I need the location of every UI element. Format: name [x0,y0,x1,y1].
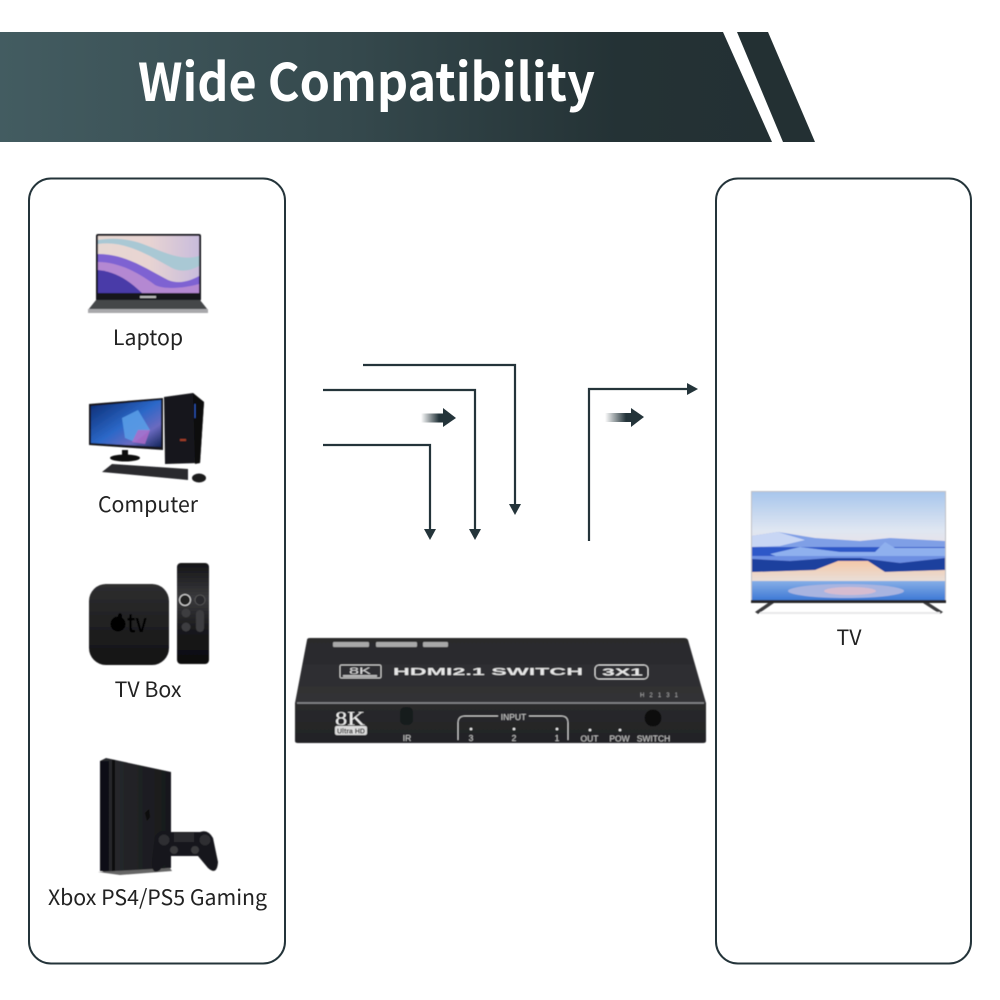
arrow: output [589,383,698,541]
icon: HDMI switch: 1 [555,733,560,743]
icon: TV box: tv [127,604,147,640]
label: TV box: TV Box [115,673,182,704]
icon: HDMI switch: 2 [512,733,517,743]
icon: TV box [89,563,209,665]
arrow: flow to switch [421,408,456,427]
label: laptop: Laptop [113,321,183,352]
icon: HDMI switch [295,638,706,744]
icon: TV [751,491,946,614]
arrow: input middle [323,390,481,540]
icon: HDMI switch: Ultra HD [337,728,365,736]
label: TV: TV [836,621,862,652]
icon: laptop [88,234,208,313]
arrow: flow to TV [605,408,644,427]
arrow: input top [363,365,521,515]
icon: HDMI switch: 8K [335,708,366,730]
icon: HDMI switch: H2131 [640,693,679,699]
icon: HDMI switch: IR [403,733,411,743]
icon: HDMI switch: INPUT [501,712,526,722]
icon: HDMI switch: POW [609,734,630,744]
icon: HDMI switch: OUT [581,734,598,744]
panel: sources [29,178,285,964]
icon: computer [89,393,206,482]
icon: HDMI switch: 3 [469,733,474,743]
label: gaming: Xbox PS4/PS5 Gaming [48,881,267,912]
panel: display [716,178,971,964]
icon: game console [98,758,218,875]
arrow: input bottom [323,445,436,540]
icon: HDMI switch: 3X1 [602,668,644,678]
title banner [0,32,815,142]
label: computer: Computer [98,488,199,519]
icon: HDMI switch: 8K [349,666,372,677]
icon: HDMI switch: SWITCH [637,734,670,744]
title: Wide Compatibility [138,41,595,116]
icon: HDMI switch: HDMI2.1 SWITCH [393,667,583,678]
